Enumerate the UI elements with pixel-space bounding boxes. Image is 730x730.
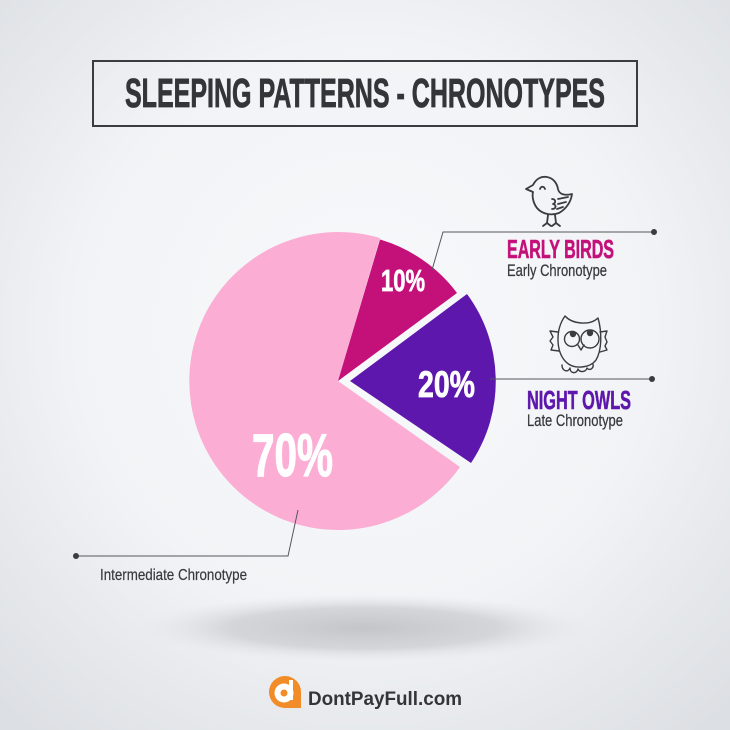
- logo: [269, 676, 462, 710]
- icon: bird: [526, 177, 572, 226]
- subheading: early chronotype: Early Chronotype: [507, 261, 607, 280]
- slice: early birds 10%: [338, 240, 457, 381]
- leader line: intermediate: [73, 510, 298, 559]
- logo wordmark: DontPayFull.com: [308, 688, 462, 710]
- leader line: night owls: [490, 376, 655, 382]
- label: intermediate chronotype: Intermediate Chronotype: [100, 567, 247, 584]
- label: 20%: 20%: [418, 364, 475, 405]
- slice: intermediate 70%: [189, 232, 460, 530]
- logo mark: [269, 676, 301, 708]
- icon: owl: [550, 316, 607, 373]
- ground shadow: [139, 594, 589, 662]
- slice: night owls 20%: [350, 294, 496, 463]
- heading: early birds: EARLY BIRDS: [507, 234, 614, 264]
- heading: night owls: NIGHT OWLS: [527, 385, 631, 415]
- leader line: early birds: [432, 229, 657, 270]
- pie chart: [189, 232, 496, 530]
- subheading: late chronotype: Late Chronotype: [527, 411, 623, 430]
- label: 10%: 10%: [381, 263, 425, 298]
- title: [93, 61, 637, 126]
- label: 70%: 70%: [252, 422, 333, 489]
